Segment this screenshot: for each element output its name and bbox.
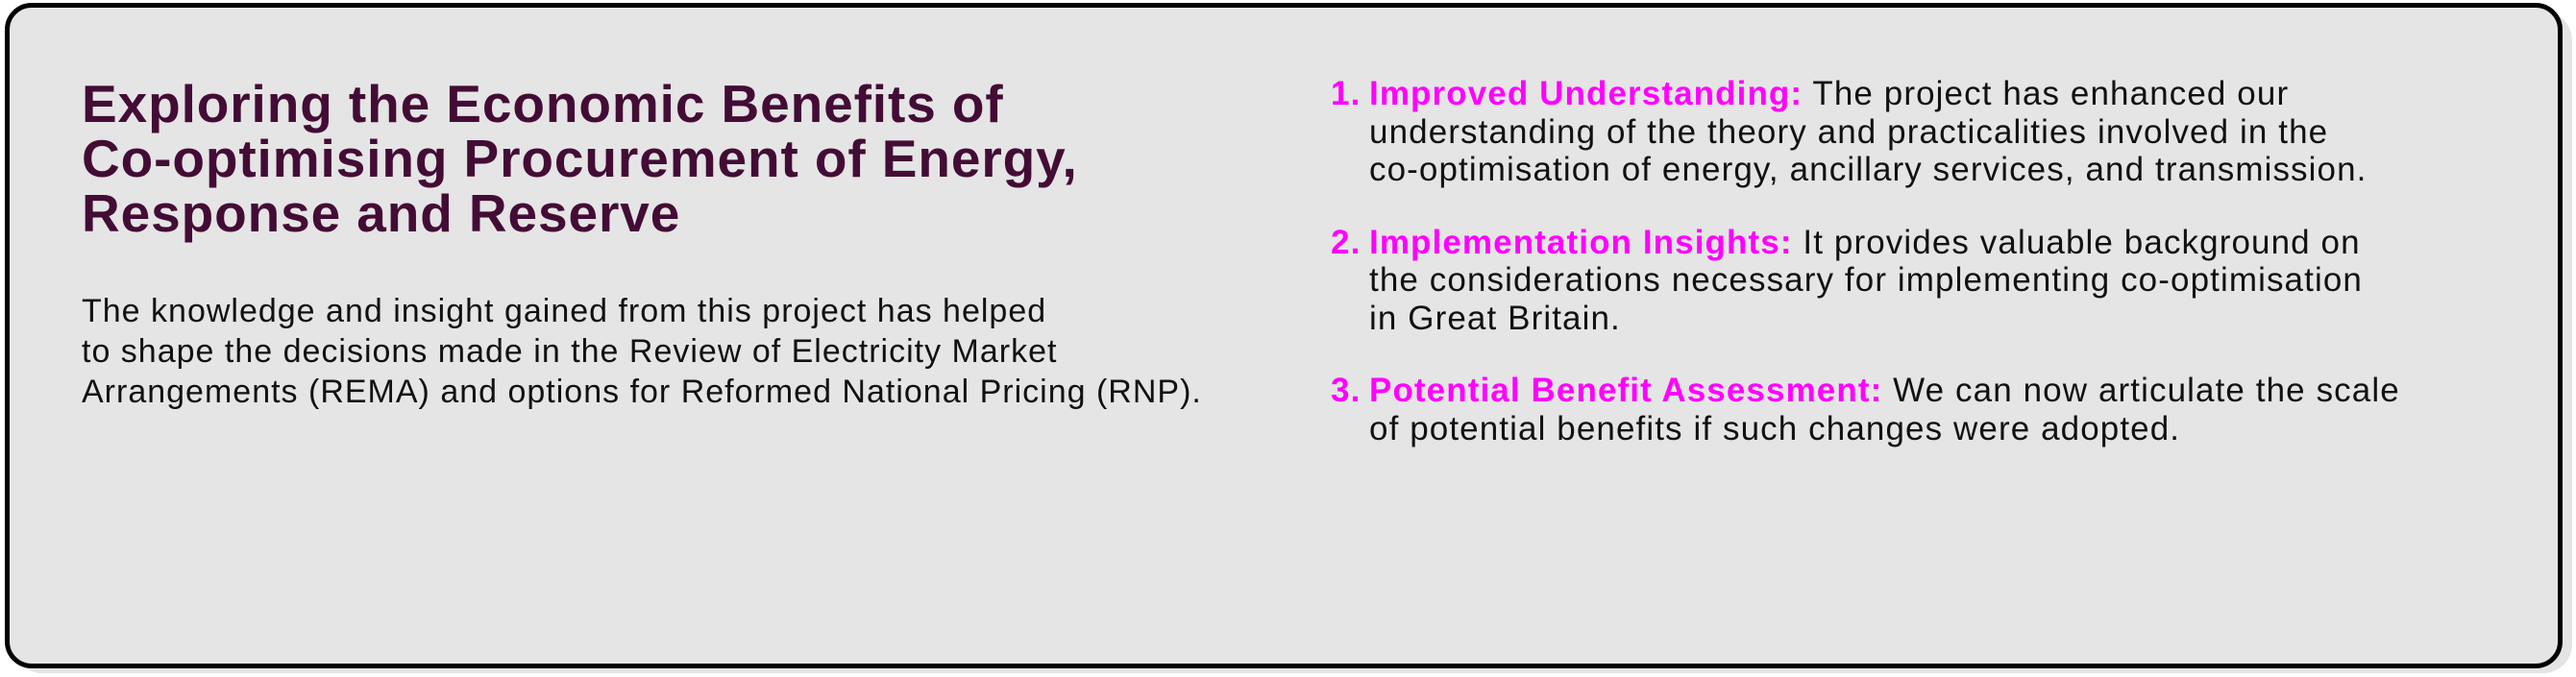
title: Response and Reserve [82, 183, 680, 243]
item 2 [1331, 223, 2363, 336]
item 2: Implementation Insights: It provides valuable background on [1369, 223, 2361, 261]
item 1: Improved Understanding: The project has enhanced our [1369, 75, 2289, 112]
title: Co-optimising Procurement of Energy, [82, 129, 1078, 188]
item 3: of potential benefits if such changes were adopted. [1369, 409, 2180, 447]
text block: intro: Arrangements (REMA) and options for Reformed National Pricing (RNP). [82, 374, 1202, 410]
item 2: 2. [1331, 223, 1361, 261]
title [82, 74, 1078, 243]
item 1: understanding of the theory and practicalities involved in the [1369, 113, 2328, 150]
text block: intro: to shape the decisions made in the Review of Electricity Market [82, 333, 1057, 370]
item 3: Potential Benefit Assessment: We can now articulate the scale [1369, 372, 2400, 409]
item 2: the considerations necessary for implementing co-optimisation [1369, 261, 2363, 299]
text block: intro [82, 293, 1202, 410]
item 3: 3. [1331, 372, 1361, 409]
title: Exploring the Economic Benefits of [82, 74, 1004, 133]
list: benefits [1331, 75, 2400, 447]
item 3 [1331, 372, 2400, 447]
item 1: co-optimisation of energy, ancillary services, and transmission. [1369, 151, 2367, 188]
text block: intro: The knowledge and insight gained from this project has helped [82, 293, 1046, 329]
item 1: 1. [1331, 75, 1361, 112]
item 1 [1331, 75, 2367, 188]
item 2: in Great Britain. [1369, 300, 1621, 336]
